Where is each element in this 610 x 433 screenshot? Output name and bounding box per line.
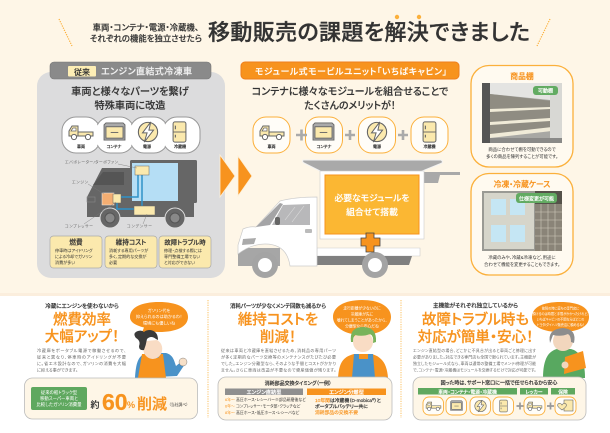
icon row: modules: 電源 [373,143,381,149]
support desk box [413,377,586,420]
result box: % [127,400,135,410]
illustration: module truck: 組合せて搭載 [346,206,398,217]
table column: engine-separated: 消耗部品の交換不要 [315,409,358,416]
section: easy troubleshooting [413,302,589,420]
section body: で、コンテナ・電源・冷蔵機はモジュールを交換するだけで対応が可能です。 [413,368,536,372]
diagram: refrigeration truck: コンデンサー [127,224,152,228]
section body: 従来と異なり、停車時のアイドリングが不要 [37,354,126,360]
section heading: 燃費効率 [53,312,111,328]
section heading: 削減！ [260,329,296,346]
card: maintenance: 維持コスト [116,238,146,246]
panel: modular unit header: モジュール式モービルユニット「いちばキャビン」 [255,65,447,76]
section heading: 大幅アップ！ [45,328,119,346]
title accents [59,15,550,46]
table column: engine-separated: ポータブルバッテリー共に [315,403,368,410]
speech bubble: 冷蔵庫が先に [351,312,374,316]
card: freezer case: 冷凍・冷蔵ケース [494,179,551,189]
section body: 冷蔵庫をポータブル電源で稼働させるので、 [37,347,126,354]
header text block [90,22,202,44]
icon row: linked parts: 車両 [77,143,85,149]
icon row: linked parts: 冷蔵機 [174,143,186,149]
table column: engine-separated: 10年間は冷蔵機（D-mobica [315,399,372,404]
table column: direct-drive: 6年～ コンプレッサー・モータ部・クラッチなど [225,404,301,408]
speech bubble [130,302,188,332]
panel header [50,62,211,79]
card: breakdown: 故障トラブル時 [164,238,206,246]
table column: direct-drive: 6年～ 高圧ホース・レシーバー※部品研磨後など [225,397,306,402]
table column: engine-separated: エンジン分離型 [329,388,364,396]
illustration: module truck [238,160,460,278]
section lead: 消耗パーツが少なくメンテ回数も減るから [230,302,326,310]
section body: が多く定期的なパーツ交換等のメンテナンスがたびたび必要 [221,354,336,360]
parts timing table: 消耗部品交換タイミング（一例） [265,380,331,387]
card: fuel: 消費が多い [55,259,75,265]
arrow: chevrons [220,155,252,197]
panel: conventional vehicle [37,62,225,278]
panel heading: merits: コンテナに様々なモジュールを組合せることで [252,85,449,98]
photo: shelves [482,83,562,143]
result box [24,378,198,419]
diagram: refrigeration truck: コンプレッサー [65,224,93,228]
result box: 移動スーパー車両と [40,395,78,402]
section body: 従来は車両と冷蔵庫を直結させるため、消耗品の専用パーツ [221,347,336,353]
section heading: 故障トラブル時も [422,310,529,328]
diagram: refrigeration truck: エンジン [72,180,88,184]
result box: 削減 [137,396,167,413]
title: 移動販売の課題を解決できました [208,20,530,45]
card: freezer case: 合わせて機能を変更することもできます。 [484,261,560,268]
tag: adjustable shelf: 可動棚 [538,88,553,95]
icon row: modules: コンテナ [316,143,331,149]
illustration: man in apron [338,327,388,378]
panel heading: 特殊車両に改造 [95,99,165,112]
result box: 約 [90,399,100,410]
card: fuel: 燃費 [69,238,83,246]
section body: 必要がありました。対応できる専門店も全国で限られています。主機能が [413,354,536,360]
card: fuel: による冷却でガソリン [55,253,92,259]
illustration: woman [134,330,187,378]
card: maintenance: 必要 [109,259,117,265]
diagram: refrigeration truck: エバポレーター/ターボファン [65,160,118,164]
section: fuel efficiency [24,302,198,419]
panel heading: merits [252,85,449,112]
icon row: modules [253,117,448,153]
panel heading: 車両と様々なパーツを繋げ [71,85,189,98]
problem cards [50,236,211,268]
table column: direct-drive: 8年～ 高圧ホース・低圧ホース・レシーバなど [225,410,300,415]
icon row: linked parts: 電源 [143,143,151,149]
panel: modular unit header [241,62,459,79]
bottom white band [0,295,610,433]
speech bubble [333,300,391,338]
speech bubble: いちばキャビンの不調ならばどこの [537,316,584,322]
card: product shelf: 多くの商品を陳列することが可能です。 [486,153,558,160]
result box: 比較したガソリン消費量 [36,401,82,408]
panel header: エンジン直結式冷凍車 [101,66,192,76]
card: product shelf: 商品に合わせて棚を可動できるので [488,146,556,153]
section heading [238,312,318,346]
card: breakdown: 専門整備工場でない [164,253,200,259]
icon row: linked parts [62,117,200,153]
icon: plus [361,233,380,252]
table column: direct-drive [225,388,306,415]
support desk box: 困った時は、サポート窓口に一括で任せられるから安心 [441,380,557,386]
speech bubble: 故障の時に直ちの専門店に [542,306,579,310]
icon row: support items [423,397,576,415]
card: breakdown [159,236,211,268]
section body: に。省エネ設計なので、ガソリンの消費を大幅 [37,360,126,367]
card: freezer case [471,174,573,275]
photo: freezer doors [482,191,562,251]
section body: 独立したモジュール式なら、車両は通常の整備工場でメンテ/修理が可能 [413,361,536,366]
header text block: それぞれの機能を独立させたら [90,34,202,44]
illustration: module truck: 必要なモジュールを [334,192,410,203]
category bars: 車両・コンテナ・電源・冷蔵機 [438,388,497,396]
diagram: refrigeration truck [65,160,197,228]
speech bubble: 抑えられるのは助かるわ！ [136,313,182,320]
card: breakdown: と対応ができない [164,259,195,265]
section heading: 対応が簡単・安心！ [418,328,533,346]
card: maintenance: 消耗する専用パーツが [109,247,148,253]
category bars: 保険 [558,388,568,396]
speech bubble: 壊れてしまうことがあったから、 [337,318,387,322]
speech bubble: 分離型なら安心だね [345,324,379,328]
card: freezer case: 冷蔵のみや、冷蔵&冷凍など、用途に [488,254,556,261]
icon row: modules: 冷蔵機 [424,143,436,149]
panel heading [71,85,189,112]
section body: エンジン直結型の場合、どこかに不具合が出ると車両ごと修理に出す [413,348,536,353]
panel header: 従来 [74,67,90,77]
speech bubble: 環境にも優しいね [143,320,176,326]
icon row: modules: 車両 [268,143,276,149]
dotted column dividers [208,300,401,418]
card: fuel: 停車時はアイドリング [55,247,93,253]
section body: でした。エンジン分離型なら、そのような手間とコストがかかり [221,360,336,366]
speech bubble: トヨタ/ダイハツ販売店に頼めるね！ [537,322,584,327]
category bars [418,388,575,396]
card: maintenance [105,236,157,268]
speech bubble [532,302,589,332]
section heading: 維持コストを [238,312,318,328]
speech bubble: 走行距離が少ないのに [343,306,381,310]
card: maintenance: 多く、定期的な交換が [109,253,146,259]
header text block: 車両・コンテナ・電源・冷蔵機、 [93,22,199,32]
speech bubble: ガソリン代を [148,307,170,314]
result box: 60 [102,389,128,415]
tag: spec change: 仕様変更が可能 [519,195,554,202]
card: product shelf: 商品棚 [510,71,534,81]
section body [221,347,336,372]
table column: engine-separated: ）と [374,398,382,404]
result box: 従来の軽トラック型 [41,389,78,396]
icon row: linked parts: コンテナ [106,143,121,149]
card: product shelf [471,66,573,167]
table column: direct-drive: エンジン直結型 [246,388,281,396]
table column: engine-separated [307,388,386,416]
parts timing table [218,377,392,420]
category bars: レッカー [525,390,543,396]
section body: ません。さらに車両は改造が不要なので資産価値が残ります。 [221,366,336,372]
panel heading: merits: たくさんのメリットが！ [304,99,396,112]
card: breakdown: 修理・点検する際には [164,247,202,253]
section body: に抑える事ができます。 [37,366,78,374]
section heading [418,310,533,346]
result box: （当社調べ） [169,402,188,407]
card: fuel [50,236,102,268]
section lead: 主機能がそれぞれ独立しているから [433,302,518,310]
speech bubble: 預けるのは時間と手間がかかったけれど、 [532,311,589,316]
section: maintenance cost [218,300,392,420]
section body [413,348,536,372]
section heading [45,312,119,346]
table column: engine-separated: ® [372,398,375,402]
section body [37,347,126,374]
section lead: 冷蔵にエンジンを使わないから [45,302,119,310]
illustration: older person with folder [543,328,586,378]
